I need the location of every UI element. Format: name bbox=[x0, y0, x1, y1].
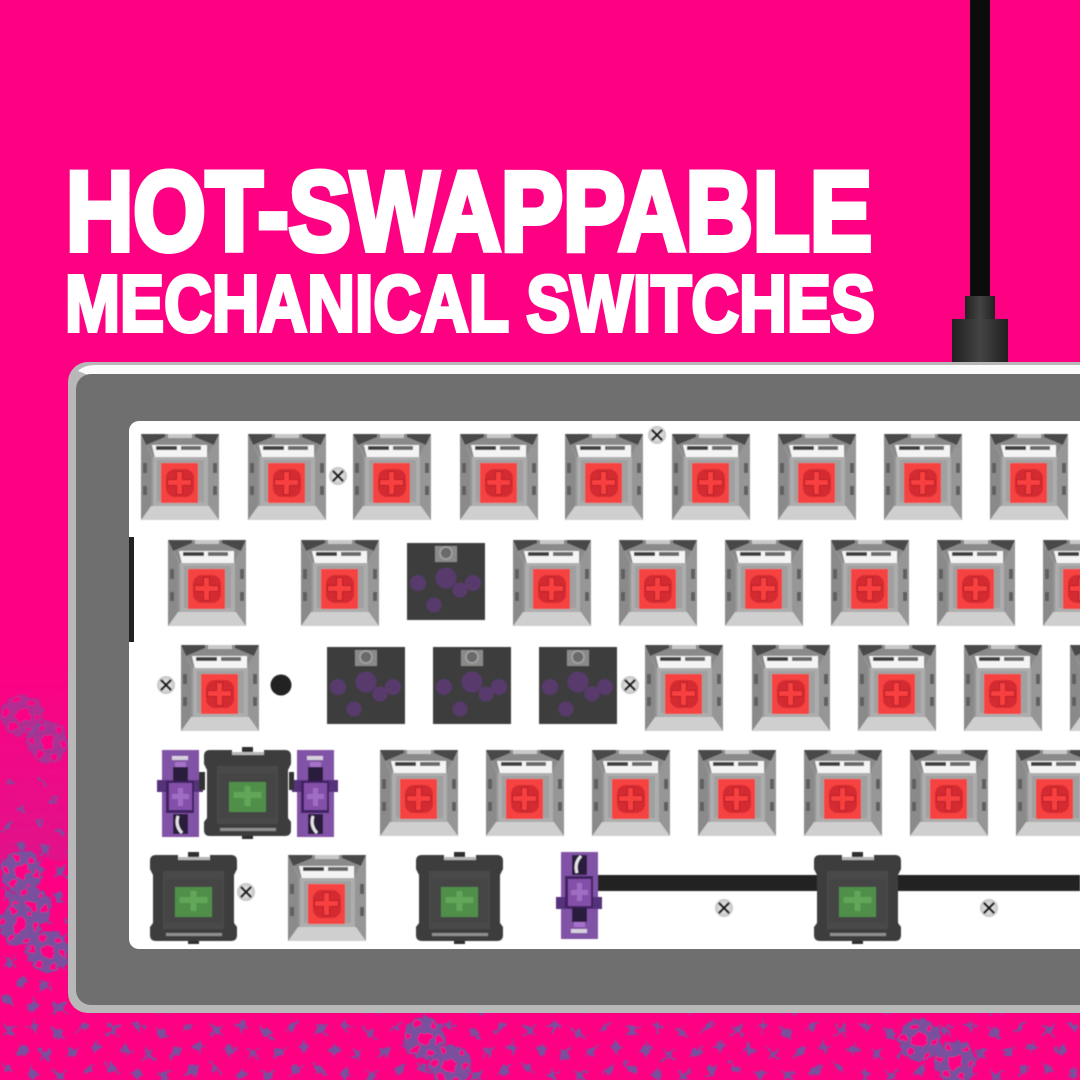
mounting hole bbox=[270, 674, 292, 696]
screw bbox=[329, 467, 347, 485]
switch bbox=[301, 540, 379, 626]
green switch bbox=[150, 852, 237, 944]
plate screws bbox=[157, 426, 998, 917]
switch bbox=[964, 645, 1042, 731]
switch bbox=[141, 434, 219, 520]
switch bbox=[804, 750, 882, 836]
background: purple speckle texture bbox=[0, 660, 1080, 1080]
stabilizer link right bbox=[289, 772, 294, 790]
switch bbox=[460, 434, 538, 520]
switches row 5 bbox=[150, 852, 1080, 944]
screw bbox=[980, 899, 998, 917]
title bbox=[65, 149, 875, 348]
switch bbox=[619, 540, 697, 626]
stabilizer right bbox=[292, 750, 338, 837]
green switch bbox=[204, 747, 291, 839]
switch bbox=[645, 645, 723, 731]
green switch bbox=[814, 852, 901, 944]
switch bbox=[937, 540, 1015, 626]
keyboard case bbox=[68, 362, 1080, 1013]
empty socket bbox=[539, 647, 617, 724]
switch bbox=[672, 434, 750, 520]
switch bbox=[592, 750, 670, 836]
switch bbox=[486, 750, 564, 836]
screw bbox=[237, 883, 255, 901]
stabilizer link left bbox=[199, 772, 205, 790]
switch bbox=[1043, 540, 1080, 626]
screw bbox=[715, 899, 733, 917]
white plate bbox=[129, 421, 1080, 949]
screw bbox=[621, 676, 639, 694]
title line 2: MECHANICAL SWITCHES bbox=[65, 259, 875, 348]
switch bbox=[353, 434, 431, 520]
switch bbox=[565, 434, 643, 520]
switch bbox=[884, 434, 962, 520]
case outer rim bbox=[68, 362, 1080, 1013]
USB cable bbox=[952, 0, 1008, 363]
switch bbox=[831, 540, 909, 626]
title line 1: HOT-SWAPPABLE bbox=[66, 149, 872, 274]
case grey frame bbox=[76, 374, 1080, 1005]
switches row 2 bbox=[168, 540, 1080, 626]
stabilizer bar bbox=[597, 875, 1080, 891]
side port bbox=[129, 537, 134, 642]
screw bbox=[648, 426, 666, 444]
switch bbox=[858, 645, 936, 731]
stabilizer left bbox=[157, 750, 203, 837]
switch bbox=[181, 645, 259, 731]
switch bbox=[380, 750, 458, 836]
empty socket bbox=[407, 543, 485, 620]
green switch bbox=[416, 852, 503, 944]
empty socket bbox=[433, 647, 511, 724]
switch bbox=[513, 540, 591, 626]
screw bbox=[157, 676, 175, 694]
case top highlight bbox=[78, 365, 1080, 375]
switches row 4 bbox=[157, 747, 1080, 839]
empty socket bbox=[327, 647, 405, 724]
switch bbox=[990, 434, 1068, 520]
switch bbox=[288, 855, 366, 941]
switch bbox=[698, 750, 776, 836]
switch bbox=[752, 645, 830, 731]
switch bbox=[725, 540, 803, 626]
switch bbox=[168, 540, 246, 626]
stabilizer bbox=[556, 852, 602, 939]
switch bbox=[778, 434, 856, 520]
switch bbox=[1070, 645, 1080, 731]
switches row 3 bbox=[181, 645, 1080, 731]
switch bbox=[248, 434, 326, 520]
switch bbox=[910, 750, 988, 836]
switches row 1 bbox=[141, 434, 1068, 520]
switch bbox=[1016, 750, 1080, 836]
